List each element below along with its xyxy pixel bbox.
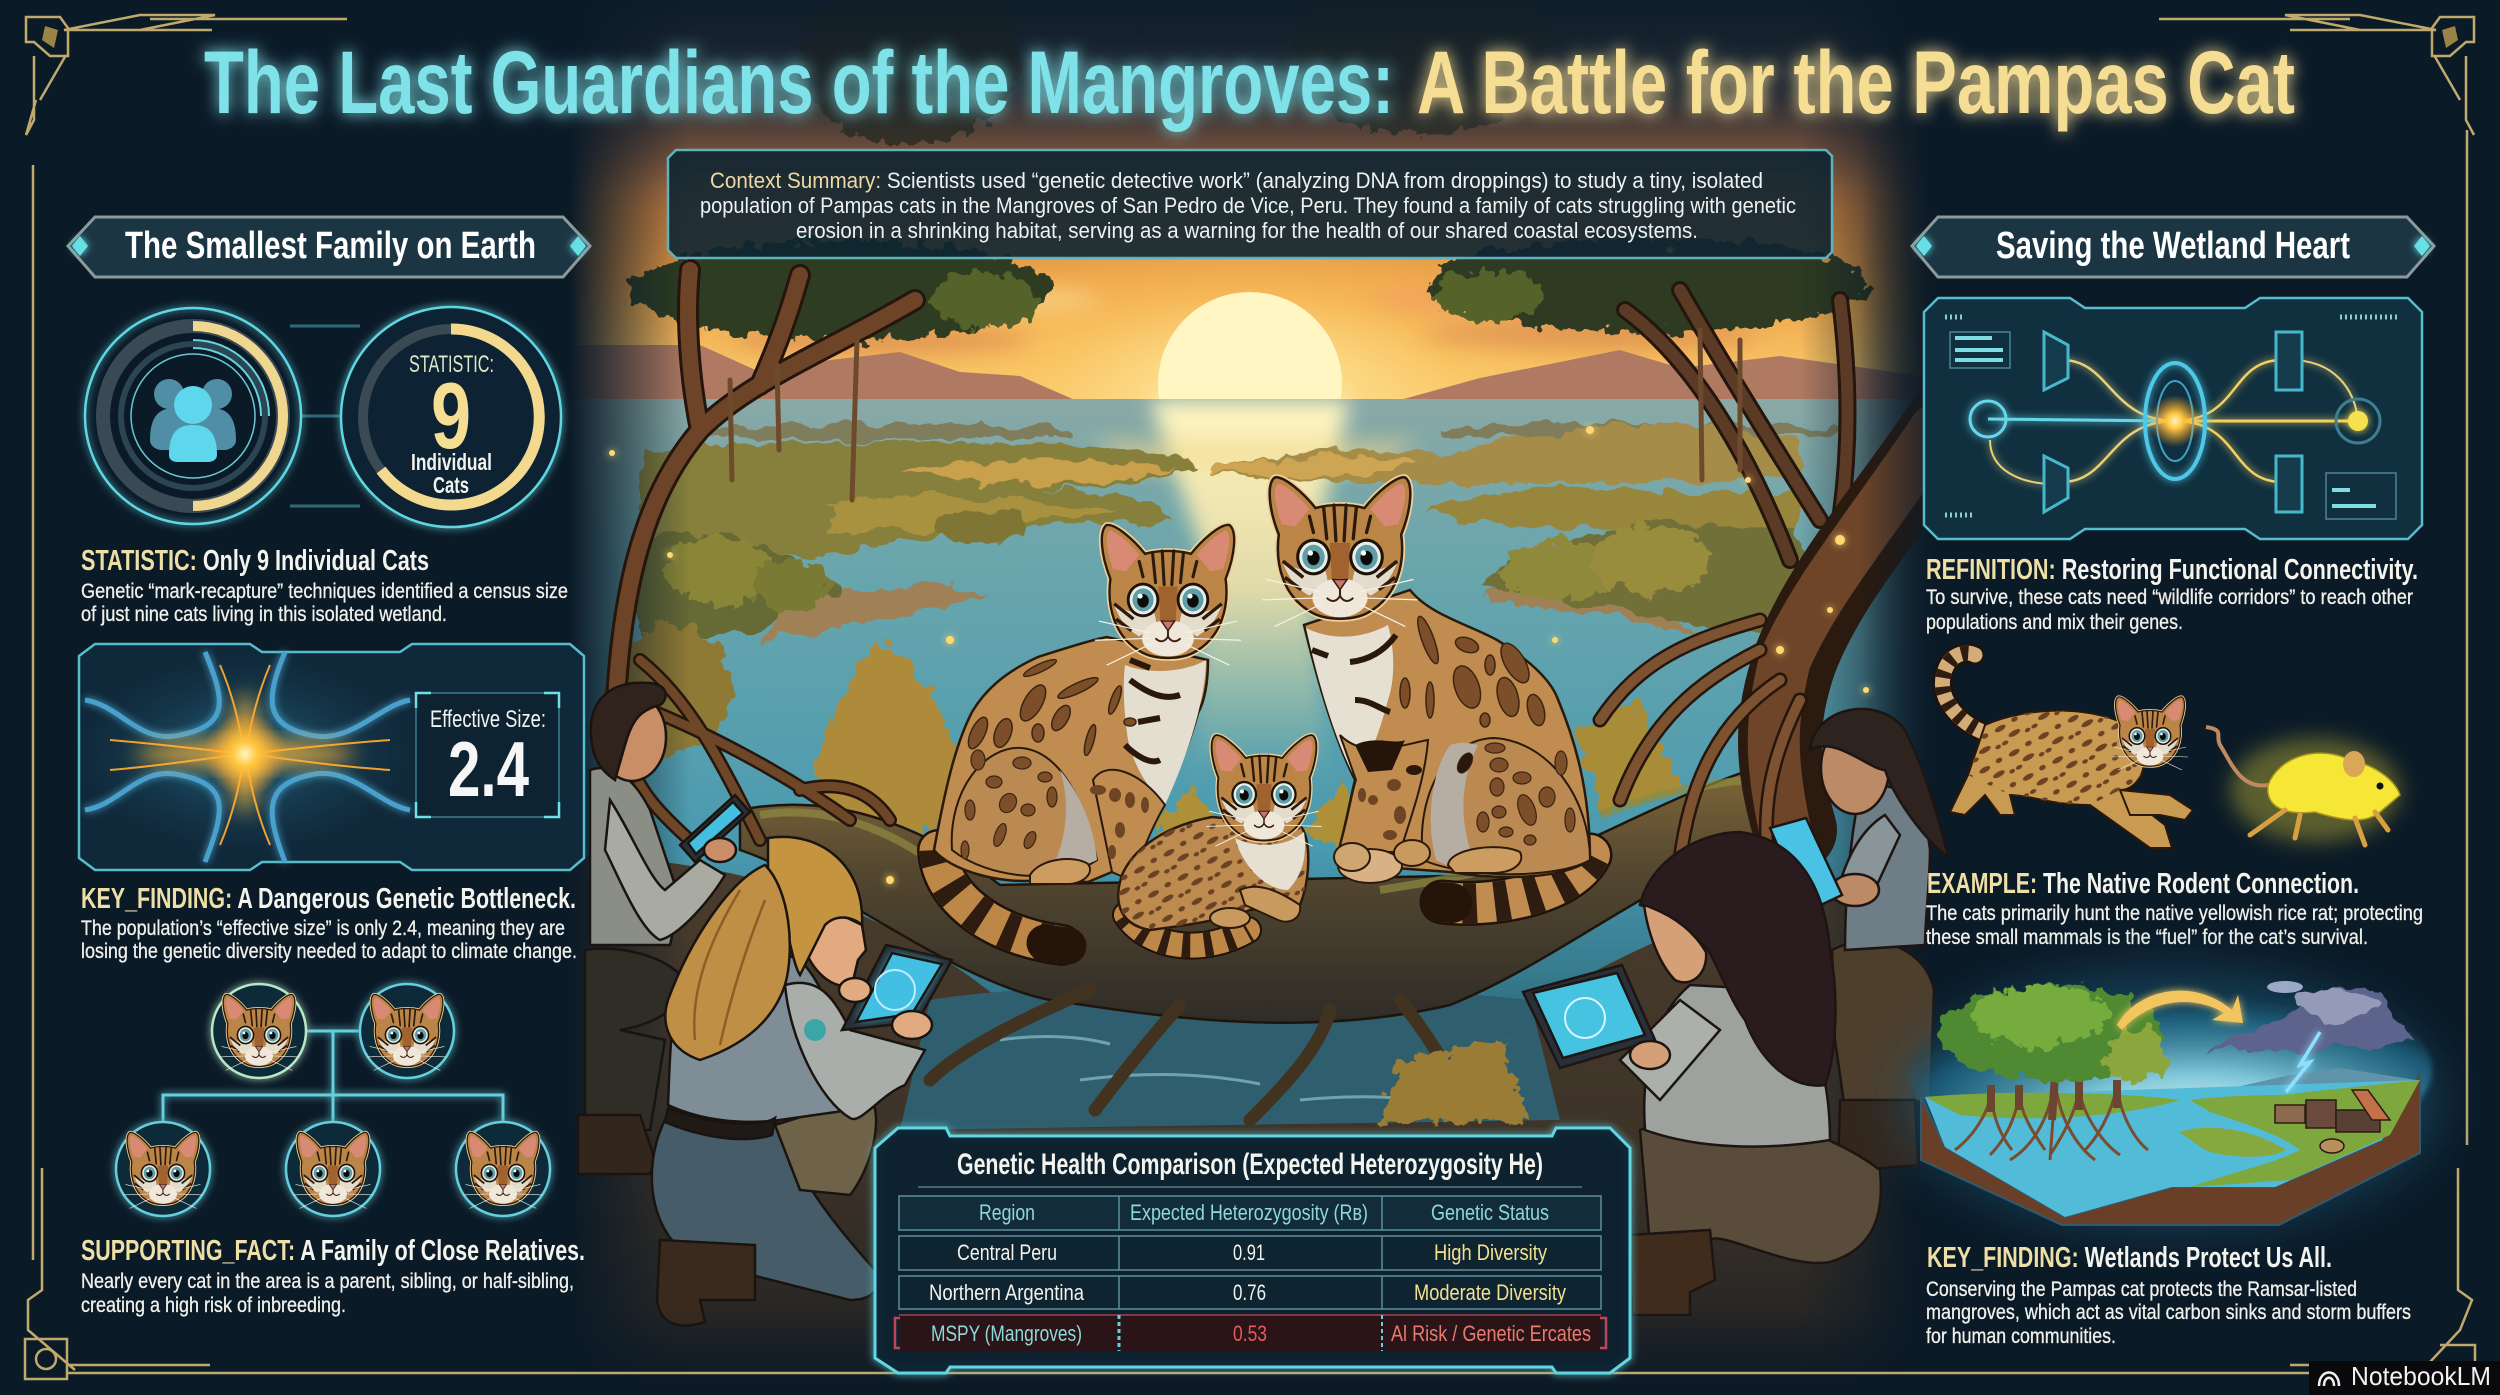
connector lines — [163, 1031, 503, 1122]
adult cat, right — [1262, 477, 1590, 903]
effective size readout: Effective Size: — [430, 706, 546, 733]
bottom fade — [480, 1310, 2040, 1395]
gauge: statistic 9 — [341, 307, 561, 527]
researcher with long dark hair and tablet — [1523, 832, 1881, 1315]
land and water — [1925, 1080, 2420, 1217]
icon: notebook arcs — [2319, 1372, 2339, 1386]
text block: statistic: of just nine cats living in this isolated wetland. — [81, 603, 447, 626]
front legs — [1093, 770, 1165, 880]
chest — [1306, 625, 1393, 778]
panel: functional connectivity circuit — [1924, 298, 2422, 539]
text block: statistic — [81, 545, 568, 626]
ribbon text: Saving the Wetland Heart — [1996, 225, 2350, 267]
corner ornament, top left — [26, 15, 347, 135]
haunch — [1422, 738, 1590, 874]
text block: wetlands finding: for human communities. — [1926, 1325, 2116, 1348]
storm cloud — [2200, 981, 2416, 1052]
text block: example: EXAMPLE: The Native Rodent Connection. — [1927, 868, 2359, 900]
gauge: statistic 9: Cats — [433, 472, 469, 498]
chest — [1124, 660, 1206, 805]
title — [204, 32, 2295, 132]
text block: key finding, bottleneck: losing the genetic diversity needed to adapt to climate change. — [81, 940, 577, 963]
table row: Northern Argentina — [899, 1276, 1601, 1309]
table row: Northern Argentina: 0.76 — [1233, 1280, 1266, 1305]
fallen mangrove log under the cats — [740, 770, 1765, 1125]
cat portrait: offspring 1 — [116, 1122, 210, 1216]
text block: statistic: Genetic “mark-recapture” techniques identified a census size — [81, 580, 568, 603]
front legs — [1338, 735, 1428, 852]
haunch — [952, 748, 1097, 876]
text block: refinition: populations and mix their genes. — [1926, 611, 2183, 634]
gauge: statistic 9: 9 — [431, 363, 471, 468]
mini data blocks — [1945, 317, 2400, 519]
text block: supporting fact: SUPPORTING_FACT: A Family of Close Relatives. — [81, 1235, 585, 1267]
panel: genetic bottleneck — [75, 644, 584, 870]
cat portrait: offspring 2 — [286, 1122, 380, 1216]
text block: supporting fact — [81, 1235, 585, 1317]
text block: key finding, bottleneck: KEY_FINDING: A Dangerous Genetic Bottleneck. — [81, 883, 576, 915]
corner ornament, top right — [2159, 15, 2474, 135]
adult cat, left — [934, 525, 1241, 946]
sun reflection on water — [1090, 400, 1420, 780]
table row: MSPY (Mangroves), at risk — [895, 1315, 1606, 1351]
NotebookLM badge: NotebookLM — [2351, 1361, 2491, 1391]
tail with rings — [938, 850, 1068, 946]
mangrove islands, left — [640, 424, 1197, 650]
text block: example: these small mammals is the “fuel” for the cat’s survival. — [1926, 926, 2368, 949]
tail with rings — [1440, 855, 1590, 903]
text block: wetlands finding: KEY_FINDING: Wetlands Protect Us All. — [1927, 1242, 2332, 1274]
table row: Central Peru: High Diversity — [1434, 1240, 1547, 1265]
NotebookLM badge — [2309, 1361, 2500, 1395]
text block: key finding, bottleneck — [81, 883, 577, 963]
central node — [1970, 363, 2380, 479]
table header row: Genetic Status — [1431, 1200, 1549, 1225]
table row: MSPY (Mangroves), at risk: MSPY (Mangroves) — [931, 1321, 1082, 1346]
illustration: running cat chasing rat — [1942, 653, 2400, 848]
mangrove tree — [1938, 984, 2167, 1160]
table title: Genetic Health Comparison (Expected Heterozygosity He) — [957, 1148, 1543, 1181]
table header row: Region — [979, 1200, 1035, 1225]
text block: supporting fact: creating a high risk of inbreeding. — [81, 1294, 346, 1317]
cat portrait: parent 1 — [212, 984, 306, 1078]
text block: wetlands finding — [1926, 1242, 2411, 1348]
pool of water in the foreground — [900, 985, 1560, 1130]
table header row — [899, 1196, 1601, 1230]
effective size readout — [416, 693, 559, 817]
population gauges — [85, 307, 561, 527]
body — [1304, 590, 1590, 877]
gauge: statistic 9: Individual — [411, 449, 492, 475]
sky with sunset — [480, 0, 2040, 615]
context text: erosion in a shrinking habitat, serving as a warning for the health of our shared coastal ecosystems. — [796, 218, 1698, 243]
table row: Central Peru — [899, 1236, 1601, 1270]
golden shrubs — [608, 526, 1710, 870]
left section heading ribbon — [68, 217, 590, 277]
text block: wetlands finding: mangroves, which act as vital carbon sinks and storm buffers — [1926, 1301, 2411, 1324]
distant mountains — [560, 345, 1950, 400]
context summary box — [668, 150, 1832, 258]
effective size readout: 2.4 — [448, 725, 529, 813]
left mangrove tree — [615, 270, 915, 850]
coat rosettes — [1400, 614, 1548, 728]
soil block — [1921, 1073, 2420, 1225]
table row: MSPY (Mangroves), at risk: 0.53 — [1233, 1321, 1267, 1346]
table header row: Expected Heterozygosity (Rв) — [1130, 1200, 1368, 1225]
gauge: statistic 9: STATISTIC: — [409, 351, 494, 378]
corridor modules — [2044, 332, 2302, 512]
lightning — [2286, 1032, 2320, 1092]
bottleneck funnel graphic — [75, 652, 415, 862]
sky and glow — [1908, 972, 2432, 1168]
table row: Central Peru: 0.91 — [1233, 1240, 1265, 1265]
family tree diagram — [116, 984, 550, 1216]
table row: Northern Argentina: Northern Argentina — [929, 1280, 1085, 1305]
lagoon water — [480, 399, 2040, 1039]
cat portrait: offspring 3 — [456, 1122, 550, 1216]
table row: Northern Argentina: Moderate Diversity — [1414, 1280, 1566, 1305]
distant mountains — [2193, 1068, 2420, 1100]
sun — [1158, 292, 1342, 476]
text block: example — [1926, 868, 2423, 949]
running cat — [1942, 653, 2193, 848]
village — [2275, 1090, 2390, 1153]
kitten — [1118, 735, 1322, 946]
corner ornament, bottom left — [25, 1128, 210, 1379]
context text — [700, 168, 1796, 243]
corner ornament, bottom right — [2290, 1168, 2475, 1365]
ribbon text: The Smallest Family on Earth — [125, 225, 536, 267]
fireflies — [609, 247, 1869, 884]
text block: example: The cats primarily hunt the native yellowish rice rat; protecting — [1926, 902, 2423, 925]
illustration: wetland diorama — [1900, 970, 2440, 1230]
context text: population of Pampas cats in the Mangroves of San Pedro de Vice, Peru. They found a family of cats struggling with genetic — [700, 193, 1796, 218]
dark canopy at the top — [630, 0, 1870, 340]
foreground ground and bank — [480, 840, 2040, 1395]
gauge: group icon — [85, 308, 301, 524]
coat rosettes — [964, 657, 1136, 756]
yellow rice rat — [2206, 727, 2400, 845]
text block: wetlands finding: Conserving the Pampas cat protects the Ramsar-listed — [1926, 1278, 2357, 1301]
text block: refinition: To survive, these cats need “wildlife corridors” to reach other — [1926, 586, 2413, 609]
title part 1: The Last Guardians of the Mangroves: — [204, 32, 1394, 132]
flow lines between corridor nodes — [1988, 360, 2358, 484]
table row: Central Peru: Central Peru — [957, 1240, 1057, 1265]
fade right trunk into panel — [1860, 0, 2500, 1395]
text block: key finding, bottleneck: The population’s “effective size” is only 2.4, meaning they are — [81, 917, 565, 940]
table row: MSPY (Mangroves), at risk: Al Risk / Genetic Ercates — [1391, 1321, 1591, 1346]
researcher on the right with tablet — [1770, 709, 1948, 1172]
researcher on the left with tablet — [578, 683, 750, 1174]
text block: refinition — [1926, 554, 2418, 634]
arrow from mangrove to storm — [2117, 991, 2243, 1030]
researcher with blonde ponytail and tablet — [652, 837, 952, 1326]
right section heading ribbon — [1912, 217, 2434, 277]
icon: group of people — [150, 379, 236, 462]
context text: Context Summary: Scientists used “genetic detective work” (analyzing DNA from droppings) to study a tiny, isolated — [710, 168, 1763, 193]
text block: statistic: STATISTIC: Only 9 Individual Cats — [81, 545, 429, 577]
panel: genetic health comparison table — [875, 1128, 1630, 1373]
right mangrove tree — [1600, 290, 1950, 880]
body — [934, 637, 1208, 882]
cat portrait: parent 2 — [360, 984, 454, 1078]
text block: supporting fact: Nearly every cat in the area is a parent, sibling, or half-sibling, — [81, 1270, 574, 1293]
mangrove islands, right — [1205, 423, 1840, 640]
